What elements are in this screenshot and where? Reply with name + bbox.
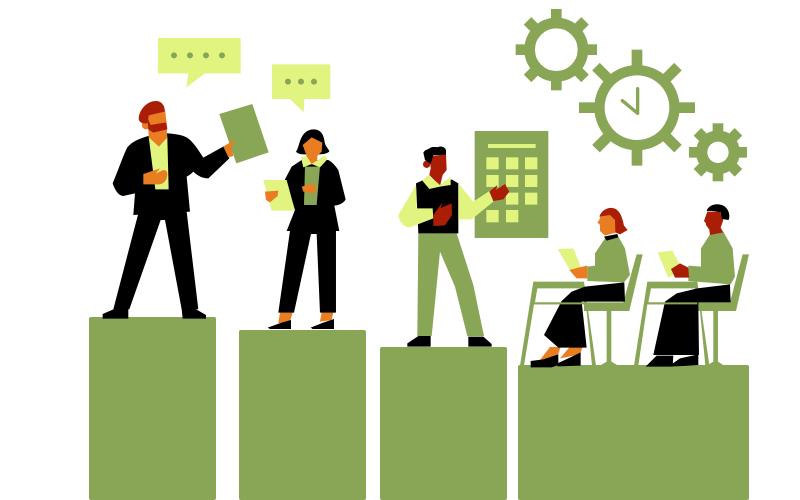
seated figures at desks xyxy=(520,204,749,367)
standing figures and speech bubbles xyxy=(103,38,346,329)
icon: clock gear xyxy=(579,50,695,166)
man with green document xyxy=(103,101,269,319)
seated man and chair xyxy=(634,204,749,367)
speech bubble: three dots xyxy=(272,64,330,112)
icon: small gear xyxy=(689,123,747,181)
seated woman and chair xyxy=(520,208,643,367)
icon: large top gear xyxy=(516,9,597,90)
podium 4 xyxy=(518,365,749,500)
icon: calculator xyxy=(475,131,548,238)
podium 3 xyxy=(380,347,507,500)
podium 1 xyxy=(89,317,216,500)
presenter man xyxy=(398,146,509,347)
speech bubble: four dots xyxy=(158,38,241,87)
gears and clock xyxy=(475,9,747,238)
podium 2 xyxy=(239,330,366,500)
woman with lime document xyxy=(263,129,346,329)
